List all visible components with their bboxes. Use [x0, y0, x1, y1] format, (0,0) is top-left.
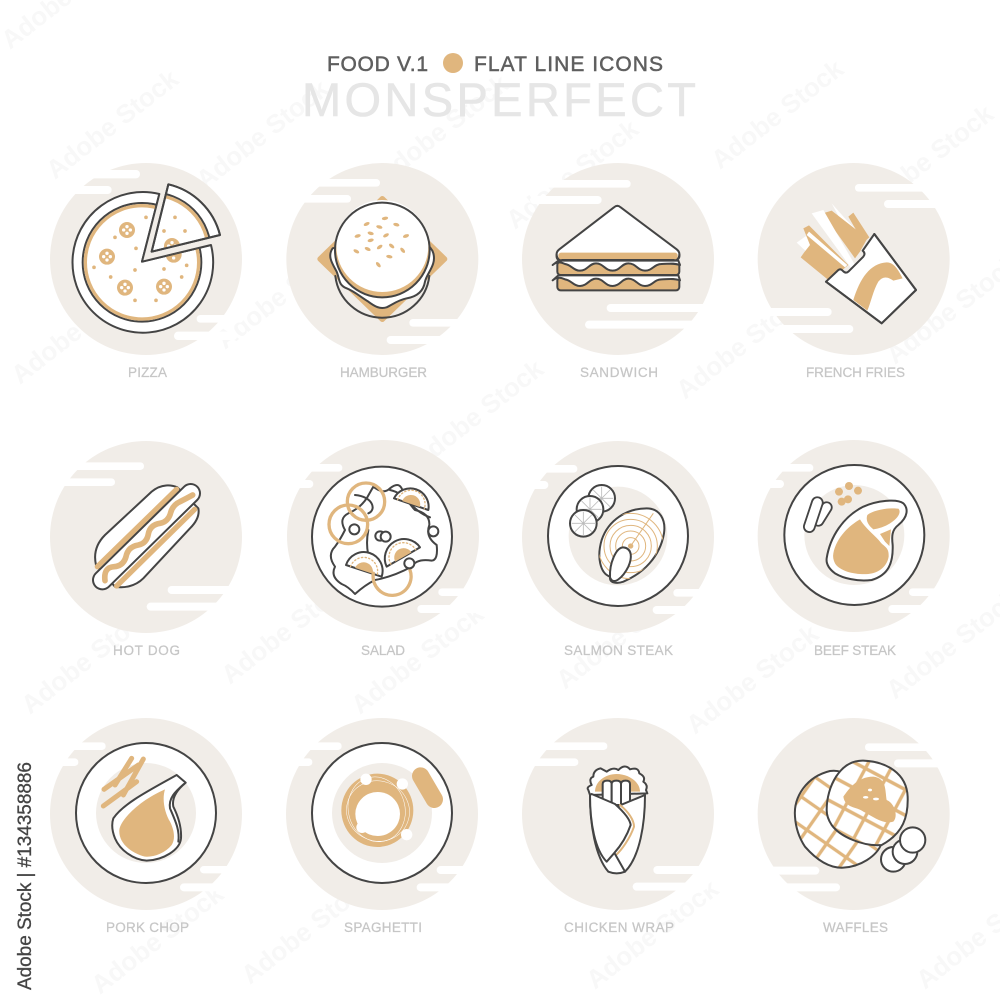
label: waffles: WAFFLES [823, 920, 888, 935]
icon: salmon plate [548, 466, 688, 606]
watermark: Adobe Stock [345, 598, 489, 720]
watermark: Adobe Stock [500, 113, 644, 235]
brand heading: MONSPERFECT [302, 73, 696, 126]
watermark: Adobe Stock [855, 98, 999, 220]
icon: spaghetti plate [312, 743, 452, 883]
panel: pork chop [50, 718, 243, 910]
icon: hot dog [95, 485, 199, 587]
watermark: Adobe Stock [15, 598, 159, 720]
label: pork chop: PORK CHOP [106, 920, 189, 935]
panel: pizza [50, 163, 243, 355]
watermark: Adobe Stock [370, 68, 514, 190]
icon: pork chop plate [76, 743, 216, 883]
panel: chicken wrap [522, 718, 717, 910]
icon: hamburger [320, 199, 445, 319]
label: pizza: PIZZA [128, 365, 167, 380]
watermark: Adobe Stock [190, 73, 334, 195]
icon: chicken wrap [588, 766, 647, 873]
panel: beef steak [758, 440, 953, 632]
watermark: Adobe Stock [40, 63, 184, 185]
panel: hot dog [50, 441, 247, 633]
label: hamburger: HAMBURGER [340, 365, 427, 380]
watermark: Adobe Stock [85, 878, 229, 1000]
watermark: Adobe Stock [5, 268, 149, 390]
label: chicken wrap: CHICKEN WRAP [564, 920, 674, 935]
title: food v.1 flat line icons: FOOD V.1 [327, 53, 428, 76]
title: food v.1 flat line icons [327, 53, 663, 76]
panel: sandwich [522, 163, 717, 355]
icon: pizza [73, 184, 220, 333]
watermark: Adobe Stock [705, 53, 849, 175]
label: salad: SALAD [361, 643, 405, 658]
label: salmon steak: SALMON STEAK [564, 643, 673, 658]
icon: waffles [795, 761, 925, 872]
watermark: Adobe Stock [550, 573, 694, 695]
icon: beef steak plate [784, 465, 924, 605]
icon: salad plate [312, 467, 452, 607]
label: beef steak: BEEF STEAK [814, 643, 896, 658]
side credit: stock id: Adobe Stock | #134358886 [15, 762, 36, 990]
watermark: Adobe Stock [680, 618, 824, 740]
watermark: Adobe Stock [215, 568, 359, 690]
watermark: Adobe Stock [405, 353, 549, 475]
panel: spaghetti [286, 718, 480, 910]
label: spaghetti: SPAGHETTI [344, 920, 422, 935]
icon: sandwich [553, 206, 680, 290]
watermark: Adobe Stock [580, 873, 724, 995]
label: sandwich: SANDWICH [580, 365, 658, 380]
panel: french fries [758, 163, 953, 355]
watermark: Adobe Stock [670, 283, 814, 405]
label: hot dog: HOT DOG [113, 643, 180, 658]
panel: waffles [758, 718, 953, 910]
panel: salad [287, 440, 487, 632]
title: food v.1 flat line icons: FLAT LINE ICONS [474, 53, 663, 76]
watermark: Adobe Stock [210, 233, 354, 355]
icon: french fries [797, 203, 916, 323]
watermark: Adobe Stock [235, 868, 379, 990]
label: french fries: FRENCH FRIES [806, 365, 905, 380]
panel: hamburger [286, 163, 480, 355]
panel: salmon steak [522, 441, 717, 633]
